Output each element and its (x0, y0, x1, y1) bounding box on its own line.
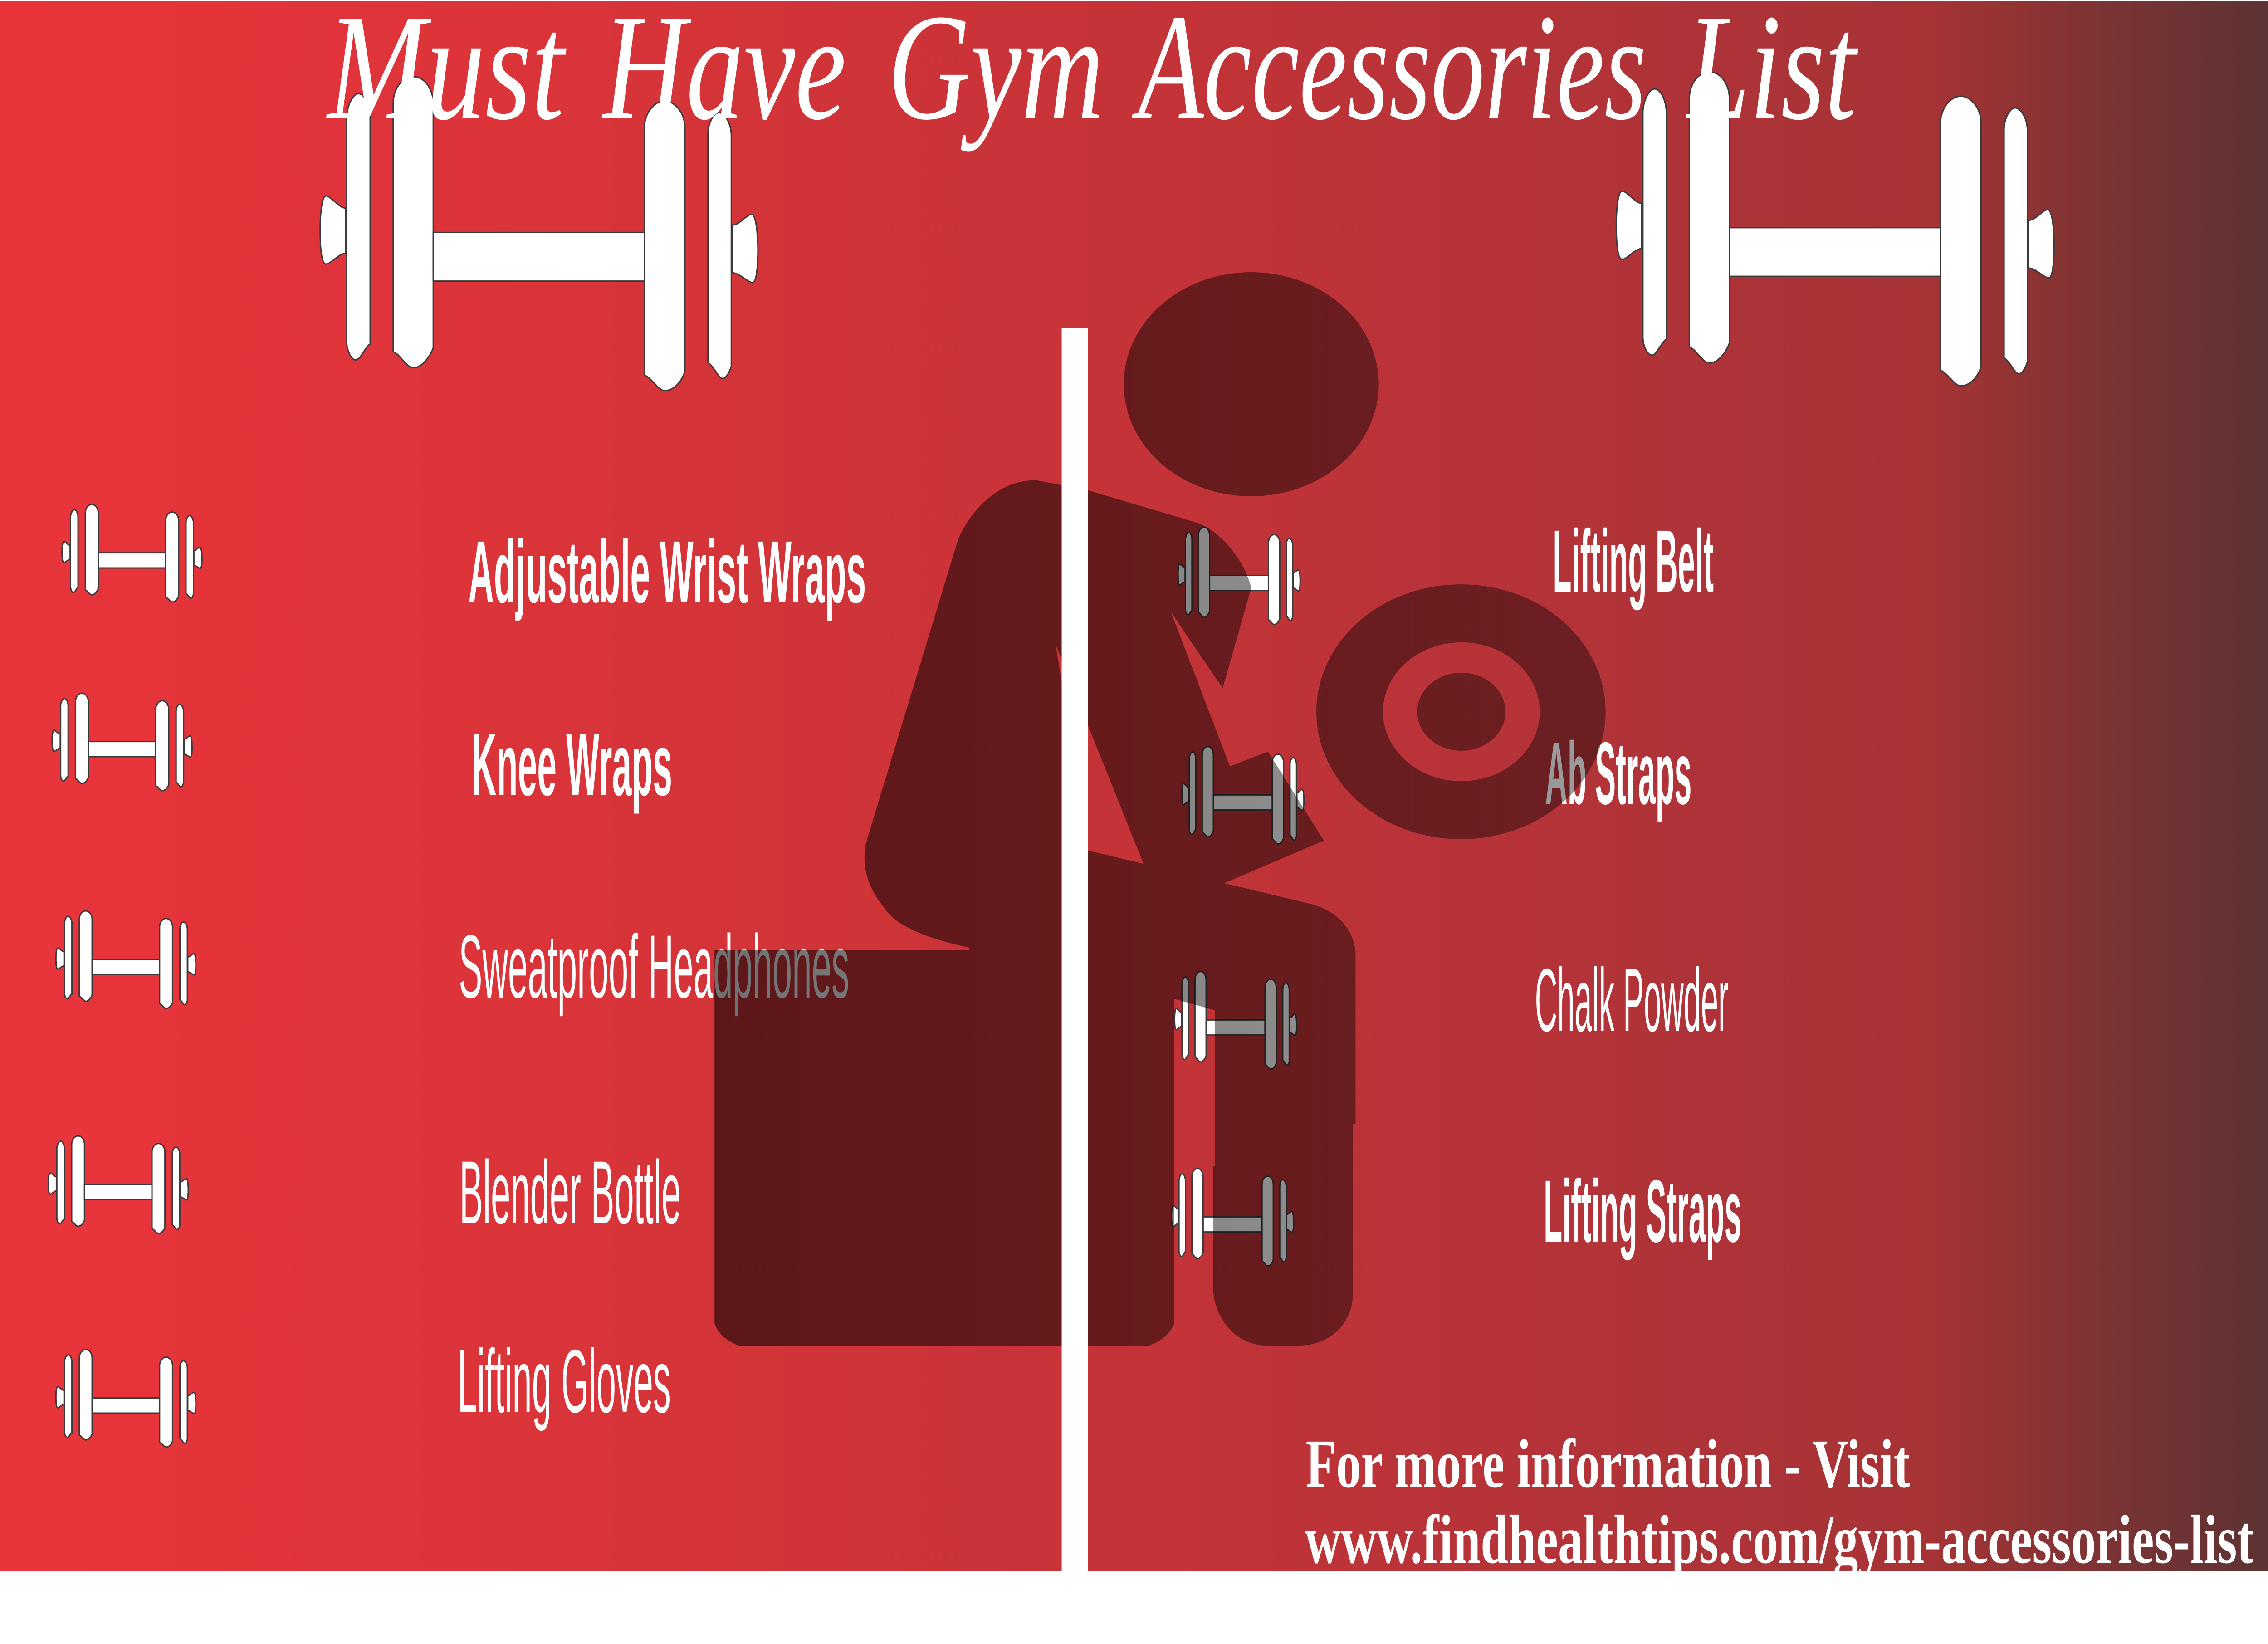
icon: bullet dumbbell 7 (1182, 747, 1304, 844)
panel: left accessories list (49, 504, 866, 1447)
icon: bullet dumbbell 9 (1172, 1169, 1294, 1266)
icon: bullet dumbbell 4 (49, 1136, 188, 1233)
icon: bullet dumbbell 2 (52, 693, 192, 791)
icon: seated person lifting weight silhouette (714, 272, 1606, 1346)
white vertical divider (1062, 328, 1088, 1580)
icon: bullet dumbbell 1 (62, 504, 202, 602)
text: Lifting Straps (1544, 1162, 1741, 1261)
icon: large dumbbell left (320, 77, 758, 391)
icon: bullet dumbbell 3 (56, 911, 196, 1008)
panel: left accessories list: Knee Wraps (471, 716, 672, 814)
text: Chalk Powder (1535, 950, 1729, 1050)
panel: right accessories list (1172, 512, 1741, 1266)
text: Adjustable Wrist Wraps (468, 523, 866, 621)
icon: large dumbbell right (1616, 72, 2054, 386)
panel: left accessories list: Blender Bottle (459, 1142, 681, 1243)
silhouette: head (1124, 272, 1379, 496)
panel: right accessories list: Ab Straps (1545, 724, 1691, 823)
text: Sweatproof Headphones (459, 916, 849, 1017)
silhouette: weight plate (1316, 584, 1606, 839)
text: Lifting Belt (1553, 512, 1714, 611)
icon: bullet dumbbell 5 (56, 1350, 196, 1447)
footer: more information link: For more information - Visit (1305, 1425, 1910, 1502)
icon: bullet dumbbell 6 (1178, 527, 1300, 625)
footer: more information link (1305, 1425, 2253, 1578)
icon: bullet dumbbell 8 (1175, 972, 1297, 1069)
silhouette: body and box (714, 480, 1355, 1346)
title (326, 0, 1860, 152)
panel: left accessories list: Lifting Gloves (458, 1331, 671, 1431)
